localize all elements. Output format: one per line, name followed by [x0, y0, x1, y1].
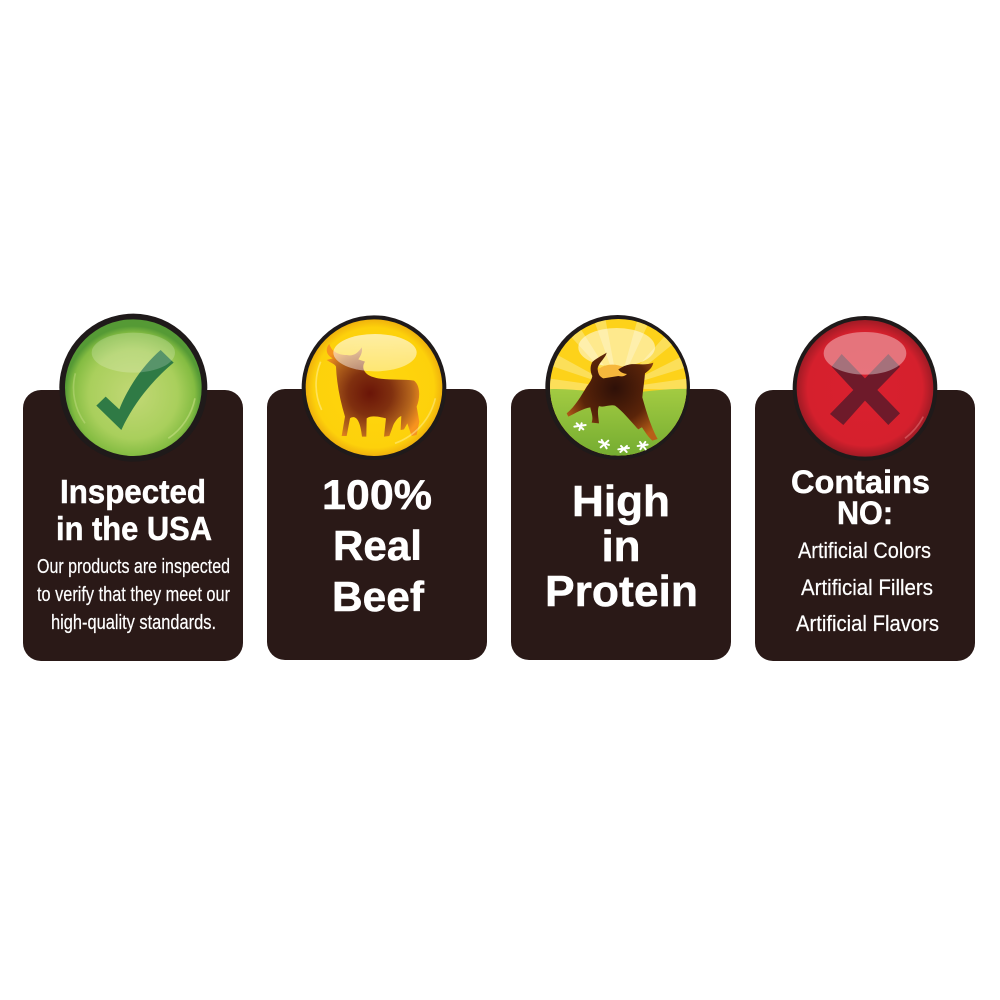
heading: High in Protein: High — [572, 477, 670, 526]
panel: inspected in the USA — [23, 314, 243, 661]
icon: flowers — [574, 423, 648, 452]
text block: inspection description: Our products are inspected — [37, 556, 230, 578]
panel: 100% real beef — [267, 315, 487, 660]
text block: artificial ingredients list: Artificial Colors — [798, 538, 931, 563]
heading: High in Protein — [545, 477, 698, 616]
heading: Inspected in the USA: in the USA — [56, 510, 212, 547]
icon: yellow bull badge — [302, 315, 446, 460]
heading: Contains NO — [791, 464, 930, 531]
text block: artificial ingredients list: Artificial Flavors — [796, 611, 939, 636]
text block: inspection description — [37, 556, 230, 634]
text block: inspection description: high-quality standards. — [51, 612, 216, 634]
text block: artificial ingredients list: Artificial Fillers — [801, 575, 933, 600]
heading: Inspected in the USA: Inspected — [60, 473, 206, 510]
heading: High in Protein: in — [601, 522, 641, 571]
panel: contains no — [755, 316, 975, 661]
text block: inspection description: to verify that they meet our — [37, 584, 230, 606]
heading: Contains NO: NO: — [837, 495, 893, 531]
heading: High in Protein: Protein — [545, 567, 698, 616]
heading: 100% Real Beef: Real — [333, 522, 422, 569]
panel: high in protein — [511, 315, 731, 660]
heading: 100% Real Beef — [322, 471, 432, 620]
heading: 100% Real Beef: Beef — [332, 573, 425, 620]
heading: 100% Real Beef: 100% — [322, 471, 432, 518]
text block: artificial ingredients list — [796, 538, 939, 636]
icon: green check mark badge — [59, 314, 207, 462]
heading: Contains NO: Contains — [791, 464, 930, 500]
heading: Inspected in the USA — [56, 473, 212, 547]
icon: red X badge — [793, 316, 937, 461]
icon: running dog badge — [545, 315, 692, 460]
